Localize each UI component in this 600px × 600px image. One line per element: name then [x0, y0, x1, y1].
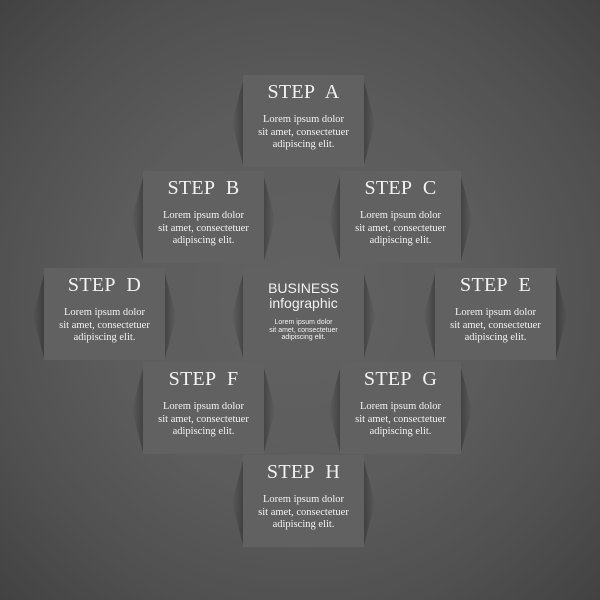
- panel: step E: sit amet, consectetuer: [450, 320, 541, 330]
- panel: step D: [44, 268, 165, 360]
- panel: center business infographic: [243, 268, 364, 360]
- panel: step A: adipiscing elit.: [273, 139, 334, 150]
- panel: step H: adipiscing elit.: [273, 519, 334, 530]
- panel: step B: sit amet, consectetuer: [158, 222, 249, 234]
- panel: step D: STEP D: [68, 274, 141, 296]
- panel: step A: sit amet, consectetuer: [258, 126, 349, 138]
- panel: step H: STEP H: [267, 461, 340, 483]
- panel: step A: STEP A: [267, 81, 340, 103]
- panel: step E: adipiscing elit.: [465, 332, 526, 343]
- panel: step A: Lorem ipsum dolor: [263, 114, 344, 125]
- panel: step G: STEP G: [364, 368, 437, 390]
- panel: step D: sit amet, consectetuer: [59, 320, 150, 330]
- panel: step E: Lorem ipsum dolor: [455, 307, 536, 318]
- panel: step F: [143, 362, 264, 454]
- panel: step H: Lorem ipsum dolor: [263, 494, 344, 505]
- panel: center business infographic: BUSINESS: [268, 280, 339, 296]
- panel: step C: Lorem ipsum dolor: [360, 210, 441, 221]
- panel: step F: sit amet, consectetuer: [158, 414, 249, 424]
- panel: step H: sit amet, consectetuer: [258, 506, 349, 518]
- panel: step G: adipiscing elit.: [370, 426, 431, 437]
- panel: step E: STEP E: [460, 274, 531, 296]
- panel: step D: Lorem ipsum dolor: [64, 307, 145, 318]
- panel: step C: adipiscing elit.: [370, 235, 431, 246]
- panel: step B: [143, 171, 264, 263]
- panel: step D: adipiscing elit.: [74, 332, 135, 343]
- panel: center business infographic: sit amet, consectetuer: [269, 326, 338, 334]
- panel: step B: STEP B: [167, 177, 240, 199]
- panel: step H: [243, 455, 364, 547]
- panel: step E: [435, 268, 556, 360]
- panel: center business infographic: infographic: [269, 295, 338, 311]
- panel: step G: [340, 362, 461, 454]
- panel: step G: Lorem ipsum dolor: [360, 401, 441, 412]
- panel: center business infographic: Lorem ipsum dolor: [275, 319, 332, 326]
- panel: step F: Lorem ipsum dolor: [163, 401, 244, 412]
- panel: step A: [243, 75, 364, 167]
- panel: step G: sit amet, consectetuer: [355, 414, 446, 424]
- panel: step B: adipiscing elit.: [173, 235, 234, 246]
- panel: step C: sit amet, consectetuer: [355, 222, 446, 234]
- panel: step B: Lorem ipsum dolor: [163, 210, 244, 221]
- panel: step F: STEP F: [169, 368, 238, 390]
- panel: step C: [340, 171, 461, 263]
- panel: step C: STEP C: [364, 177, 437, 199]
- panel: step F: adipiscing elit.: [173, 426, 234, 437]
- panel: center business infographic: adipiscing elit.: [282, 334, 325, 341]
